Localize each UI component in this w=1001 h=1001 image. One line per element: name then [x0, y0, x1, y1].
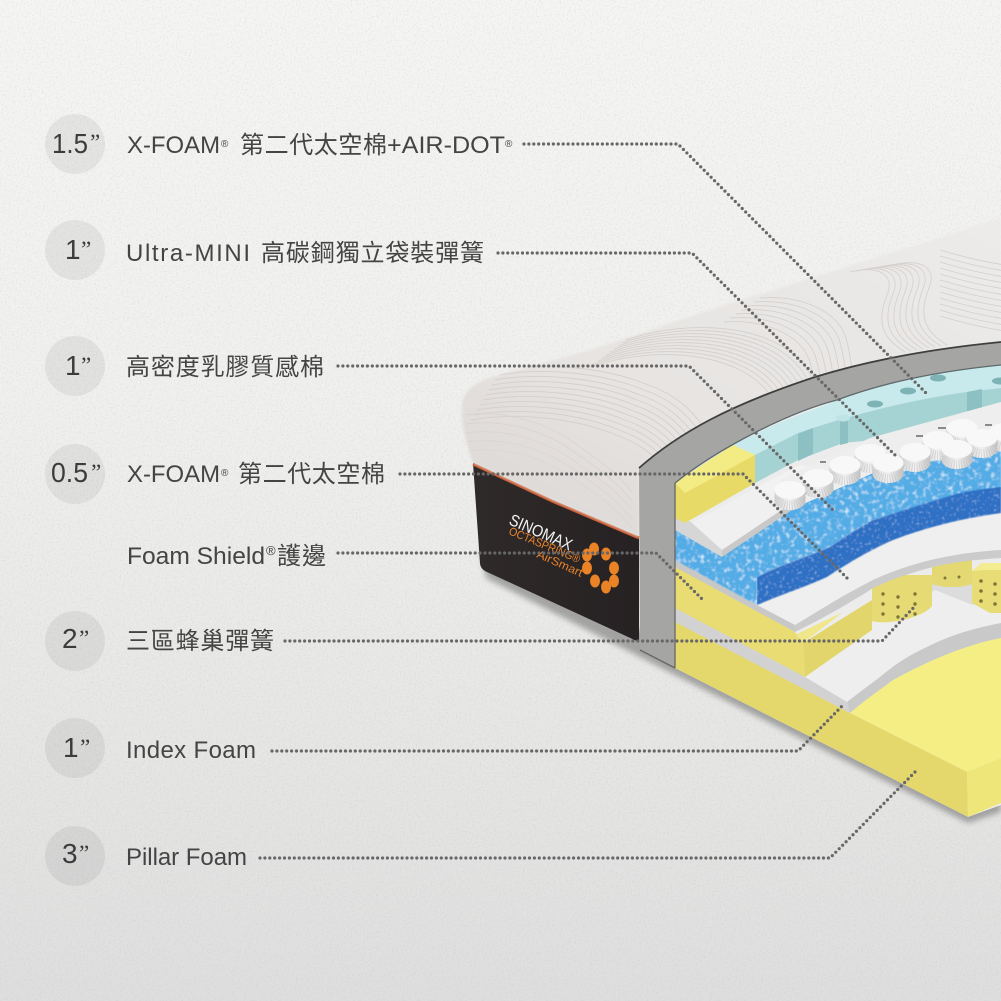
row 4: thickness badge 0.5: ” — [91, 460, 101, 485]
knit mattress cover — [462, 217, 1001, 537]
leader line: Pillar Foam — [260, 771, 916, 858]
orange piping seam — [473, 464, 639, 538]
leader line: Foam Shield — [338, 553, 703, 600]
row 1: thickness badge 1.5 — [45, 114, 105, 174]
layer: yellow foam shield — [675, 445, 755, 523]
row 5: label — [127, 543, 326, 570]
brand name: AirSmart: AirSmart — [535, 549, 585, 580]
leader line: X-FOAM + AIR-DOT — [524, 144, 927, 394]
honeycomb spring, right — [972, 563, 1001, 613]
row 5: label: Foam Shield — [127, 543, 265, 570]
layer: blue sponge — [675, 438, 1001, 605]
dark side panel with brand — [473, 463, 639, 642]
row 5: label: 護邊 — [277, 543, 326, 570]
leader line: honeycomb springs — [285, 605, 916, 641]
row 1: thickness badge 1.5: 1.5 — [52, 128, 88, 159]
row 4: thickness badge 0.5 — [45, 444, 105, 504]
row 8: thickness badge 3: 3 — [62, 838, 78, 869]
layer: X-FOAM plate — [676, 509, 792, 557]
row 7: thickness badge 1: ” — [80, 735, 90, 760]
layer: latex foam — [676, 550, 1001, 632]
row 3: thickness badge 1: 1 — [65, 350, 81, 381]
row 1: label: ® — [505, 139, 513, 150]
layer: Pillar Foam — [675, 621, 1001, 817]
row 4: thickness badge 0.5: 0.5 — [51, 457, 88, 488]
row 1: label — [127, 132, 513, 159]
row 2: label — [126, 240, 484, 267]
honeycomb spring, centre — [872, 575, 932, 622]
layer: teal AIR-DOT foam — [733, 365, 1001, 483]
row 7: label: Index Foam — [126, 737, 256, 764]
row 2: label: 高碳鋼獨立袋裝彈簧 — [261, 240, 484, 267]
row 2: thickness badge 1: ” — [81, 237, 91, 262]
leader line: Ultra-MINI — [498, 253, 898, 458]
row 7: thickness badge 1: 1 — [63, 732, 79, 763]
icon: orange dot ring — [582, 542, 619, 594]
row 1: label: 第二代太空棉 — [240, 132, 387, 159]
row 6: thickness badge 2: ” — [79, 626, 89, 651]
row 1: thickness badge 1.5: ” — [90, 130, 100, 155]
row 5: label: ® — [266, 543, 276, 558]
mattress ground shadow — [480, 550, 1001, 823]
row 3: thickness badge 1: ” — [81, 353, 91, 378]
leader line: latex foam — [338, 366, 833, 510]
row 4: label — [127, 461, 385, 488]
row 6: thickness badge 2: 2 — [62, 623, 78, 654]
row 1: label: ® — [221, 139, 229, 150]
row 4: label: ® — [221, 468, 229, 479]
row 7: thickness badge 1 — [45, 718, 105, 778]
row 6: thickness badge 2 — [45, 611, 105, 671]
row 6: label: 三區蜂巢彈簧 — [126, 628, 274, 655]
layer: Index Foam — [675, 570, 1001, 713]
row 8: label: Pillar Foam — [126, 844, 247, 871]
row 3: thickness badge 1 — [45, 336, 105, 396]
row 1: label: +AIR-DOT — [387, 132, 505, 159]
row 2: thickness badge 1 — [45, 220, 105, 280]
row 8: thickness badge 3: ” — [79, 841, 89, 866]
brand name: OCTASPRING: OCTASPRING® — [507, 526, 582, 566]
leader line: Index Foam — [272, 704, 844, 751]
layer: pocket springs — [774, 402, 1001, 510]
row 2: label: Ultra-MINI — [126, 240, 250, 267]
layer: honeycomb springs — [872, 560, 1001, 622]
brand name: SINOMAX: SINOMAX — [506, 511, 575, 554]
row 4: label: X-FOAM — [127, 461, 220, 488]
row 1: label: X-FOAM — [127, 132, 220, 159]
mattress cross-section illustration — [462, 217, 1001, 830]
interior layers — [670, 360, 1001, 830]
row 4: label: 第二代太空棉 — [238, 461, 385, 488]
row 8: thickness badge 3 — [45, 826, 105, 886]
row 3: label: 高密度乳膠質感棉 — [126, 354, 324, 381]
row 2: thickness badge 1: 1 — [65, 234, 81, 265]
leader line: X-FOAM — [400, 474, 849, 580]
foam shield grey frame — [639, 342, 1001, 668]
honeycomb spring, back — [932, 560, 972, 587]
yellow foam block — [675, 566, 872, 677]
